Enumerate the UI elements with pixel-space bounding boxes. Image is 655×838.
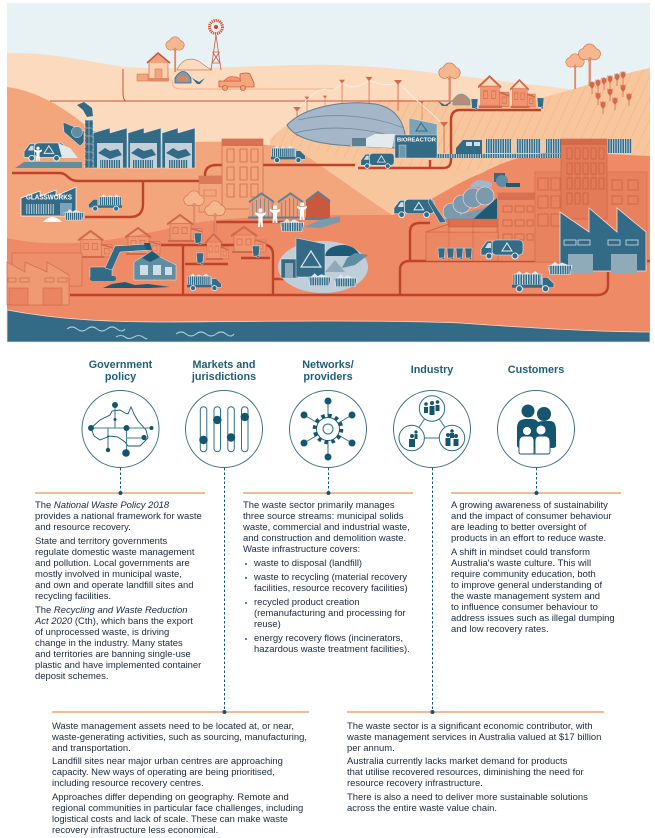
text block: industry	[347, 720, 601, 814]
text block: customers: require community education, both	[451, 569, 596, 580]
text block: government policy: mostly involved in municipal waste,	[35, 569, 182, 580]
heading: markets and jurisdictions: Markets and	[192, 359, 256, 371]
sky	[7, 3, 650, 342]
text block: government policy: and pollution. Local governments are	[35, 558, 190, 569]
foreground salmon land	[7, 152, 650, 342]
wheelie bins row	[438, 248, 472, 260]
peach hill with hatching	[270, 68, 650, 342]
section rules	[35, 492, 621, 713]
heading: industry: Industry	[411, 364, 453, 376]
distant thin pipelines	[50, 69, 460, 101]
text block: markets and jurisdictions: logistical costs and lack of scale. These can make waste	[52, 814, 288, 824]
glassworks factory	[21, 187, 77, 222]
left factory with chimney	[63, 102, 195, 168]
text block: markets and jurisdictions: regional communities in particular face challenges, including	[52, 802, 303, 814]
text block: networks and providers: energy recovery flows (incinerators,	[254, 633, 403, 644]
text block: industry: resource recovery infrastructure.	[347, 778, 483, 788]
text block: government policy: and territories are banning single-use	[35, 649, 191, 660]
icon: industry groups	[394, 390, 470, 468]
small town building and trees	[184, 176, 225, 240]
heading: government policy: policy	[105, 370, 136, 382]
power lines	[298, 80, 444, 126]
sheds	[248, 191, 331, 220]
text block: industry: The waste sector is a significant economic contributor, with	[347, 720, 592, 732]
icon: networks gear	[290, 390, 366, 468]
back hills	[7, 53, 650, 342]
right side trees and wheat	[566, 44, 631, 114]
text block: government policy: regulate domestic waste management	[35, 547, 194, 558]
glassworks skip	[64, 209, 84, 220]
basket truck right	[512, 271, 554, 292]
skip by factory	[548, 262, 572, 274]
text block: markets and jurisdictions: Approaches differ depending on geography. Remote and	[52, 792, 289, 802]
material recovery facility	[278, 238, 368, 293]
basket truck on top pipe	[271, 146, 305, 163]
demolished blue house	[134, 251, 176, 280]
heading: government policy	[89, 359, 152, 382]
text block: networks and providers: facilities, resource recovery facilities)	[254, 583, 408, 594]
farm truck	[219, 73, 254, 90]
text block: markets and jurisdictions: waste-generating activities, such as sourcing, manufacturing,	[52, 732, 307, 742]
mid orange land	[7, 87, 392, 342]
text block: customers: are leading to better oversight of	[451, 522, 586, 533]
main pipelines	[12, 110, 650, 295]
terrace houses	[426, 219, 498, 261]
text block: customers	[451, 500, 615, 635]
left garbage truck	[24, 143, 78, 161]
bioreactor building: BIOREACTOR	[397, 138, 436, 144]
text block: customers: address issues such as illegal dumping	[451, 613, 615, 624]
road	[15, 162, 82, 168]
text block: government policy: provides a national framework for waste	[35, 511, 202, 522]
farm homestead	[137, 37, 212, 81]
landfill truck	[361, 153, 394, 168]
text block: government policy: and resource recovery.	[35, 522, 131, 533]
illustration: waste infrastructure landscape	[7, 3, 650, 342]
text block: industry: waste management services in Australia valued at $17 billion	[347, 732, 601, 742]
icon: markets sliders	[186, 390, 262, 468]
icon: government policy map	[82, 390, 159, 468]
heading: networks providers: providers	[303, 370, 353, 382]
landfill dome	[287, 103, 406, 148]
excavator	[90, 243, 152, 281]
text block: networks and providers	[243, 500, 410, 655]
sea	[7, 310, 650, 342]
text block: government policy: recycling facilities.	[35, 591, 111, 602]
glassworks factory: GLASSWORKS	[26, 192, 72, 202]
heading: customers: Customers	[508, 364, 564, 376]
text block: industry: There is also a need to deliver more sustainable solutions	[347, 792, 588, 802]
text block: customers: products in an effort to reduce waste.	[451, 533, 606, 544]
text block: customers: Australia's waste culture. This will	[451, 558, 591, 569]
text block: markets and jurisdictions: capacity. New ways of operating are being prioritised,	[52, 766, 275, 778]
text block: customers: to influence consumer behaviour to	[451, 602, 598, 613]
right brick buildings	[498, 139, 647, 265]
text block: markets and jurisdictions: recovery infrastructure less economical.	[52, 824, 218, 836]
text block: government policy: and own and operate landfill sites and	[35, 580, 193, 591]
text block: networks and providers: (remanufacturing and processing for	[254, 608, 406, 619]
top right houses	[438, 63, 544, 110]
text block: networks and providers: hazardous waste treatment facilities).	[254, 644, 410, 655]
heading: markets and jurisdictions	[192, 359, 256, 382]
basket truck lower	[187, 274, 221, 291]
garbage truck right top	[394, 199, 434, 218]
skip and rubble	[280, 216, 340, 232]
text block: markets and jurisdictions	[52, 720, 307, 836]
glassworks truck	[88, 194, 122, 211]
rubble	[103, 282, 170, 288]
central brick tower	[222, 139, 263, 209]
waves	[67, 327, 234, 339]
heading: government policy: Government	[89, 359, 152, 371]
text block: customers: and the impact of consumer behaviour	[451, 511, 612, 522]
text block: markets and jurisdictions: Waste management assets need to be located at, or near,	[52, 720, 294, 732]
poles	[293, 77, 448, 153]
text block: networks and providers: Waste infrastructure covers:	[243, 544, 360, 555]
text block: networks and providers: waste to disposal (landfill)	[254, 558, 362, 569]
icon: customers family	[498, 390, 574, 468]
text block: networks and providers: three source streams: municipal solids	[243, 511, 404, 522]
windmill	[210, 20, 222, 70]
text block: networks and providers: recycled product creation	[254, 597, 359, 608]
text block: industry: per annum.	[347, 742, 395, 754]
text block: customers: the waste management system and	[451, 591, 600, 602]
village bins	[194, 233, 260, 265]
tractor and grey waste piles	[442, 173, 520, 222]
text block: government policy: deposit schemes.	[35, 671, 108, 682]
heading: networks providers	[302, 359, 354, 382]
text block: government policy: The National Waste Policy 2018	[35, 500, 169, 511]
text block: customers: A shift in mindset could transform	[451, 547, 590, 558]
text block: industry: Australia currently lacks market demand for products	[347, 756, 567, 766]
text block: government policy	[34, 500, 202, 682]
left orange factory	[7, 253, 82, 305]
text block: customers: A growing awareness of sustainability	[451, 500, 608, 511]
text block: markets and jurisdictions: including resource recovery centres.	[52, 778, 204, 788]
heading: networks providers: Networks/	[302, 359, 354, 371]
text block: markets and jurisdictions: Landfill sites near major urban centres are approaching	[52, 756, 283, 766]
village houses	[78, 215, 266, 260]
text block: networks and providers: waste to recycling (material recovery	[254, 572, 407, 583]
text block: government policy: change in the industry. Many states	[35, 638, 183, 649]
heading: markets and jurisdictions: jurisdictions	[192, 370, 256, 382]
text block: government policy: The Recycling and Waste Reduction	[35, 605, 188, 616]
barn and birds	[175, 72, 205, 84]
text block: networks and providers: The waste sector primarily manages	[243, 500, 395, 511]
connector dots	[118, 491, 538, 714]
text block: government policy: of unprocessed waste, is driving	[35, 627, 169, 638]
text block: industry: across the entire waste value chain.	[347, 802, 497, 814]
bioreactor building	[395, 118, 437, 158]
text block: networks and providers: and construction and demolition waste.	[243, 533, 406, 544]
text block: networks and providers: waste, commercial and industrial waste,	[243, 522, 410, 533]
text block: networks and providers: reuse)	[254, 619, 281, 630]
people	[255, 202, 307, 227]
container train	[437, 139, 632, 158]
text block: customers: to improve general understanding of	[451, 580, 602, 591]
text block: government policy: State and territory governments	[35, 536, 167, 547]
garbage truck right lower	[481, 240, 523, 259]
text block: government policy: plastic and have implemented container	[35, 660, 201, 671]
blue factory right	[560, 208, 646, 273]
text block: government policy: Act 2020 (Cth), which bans the export	[35, 616, 193, 627]
text block: customers: and low recovery rates.	[451, 624, 549, 635]
dotted connectors	[120, 468, 536, 712]
text block: markets and jurisdictions: and transportation.	[52, 742, 131, 754]
text block: industry: that utilise recovered resources, diminishing the need for	[347, 766, 584, 778]
